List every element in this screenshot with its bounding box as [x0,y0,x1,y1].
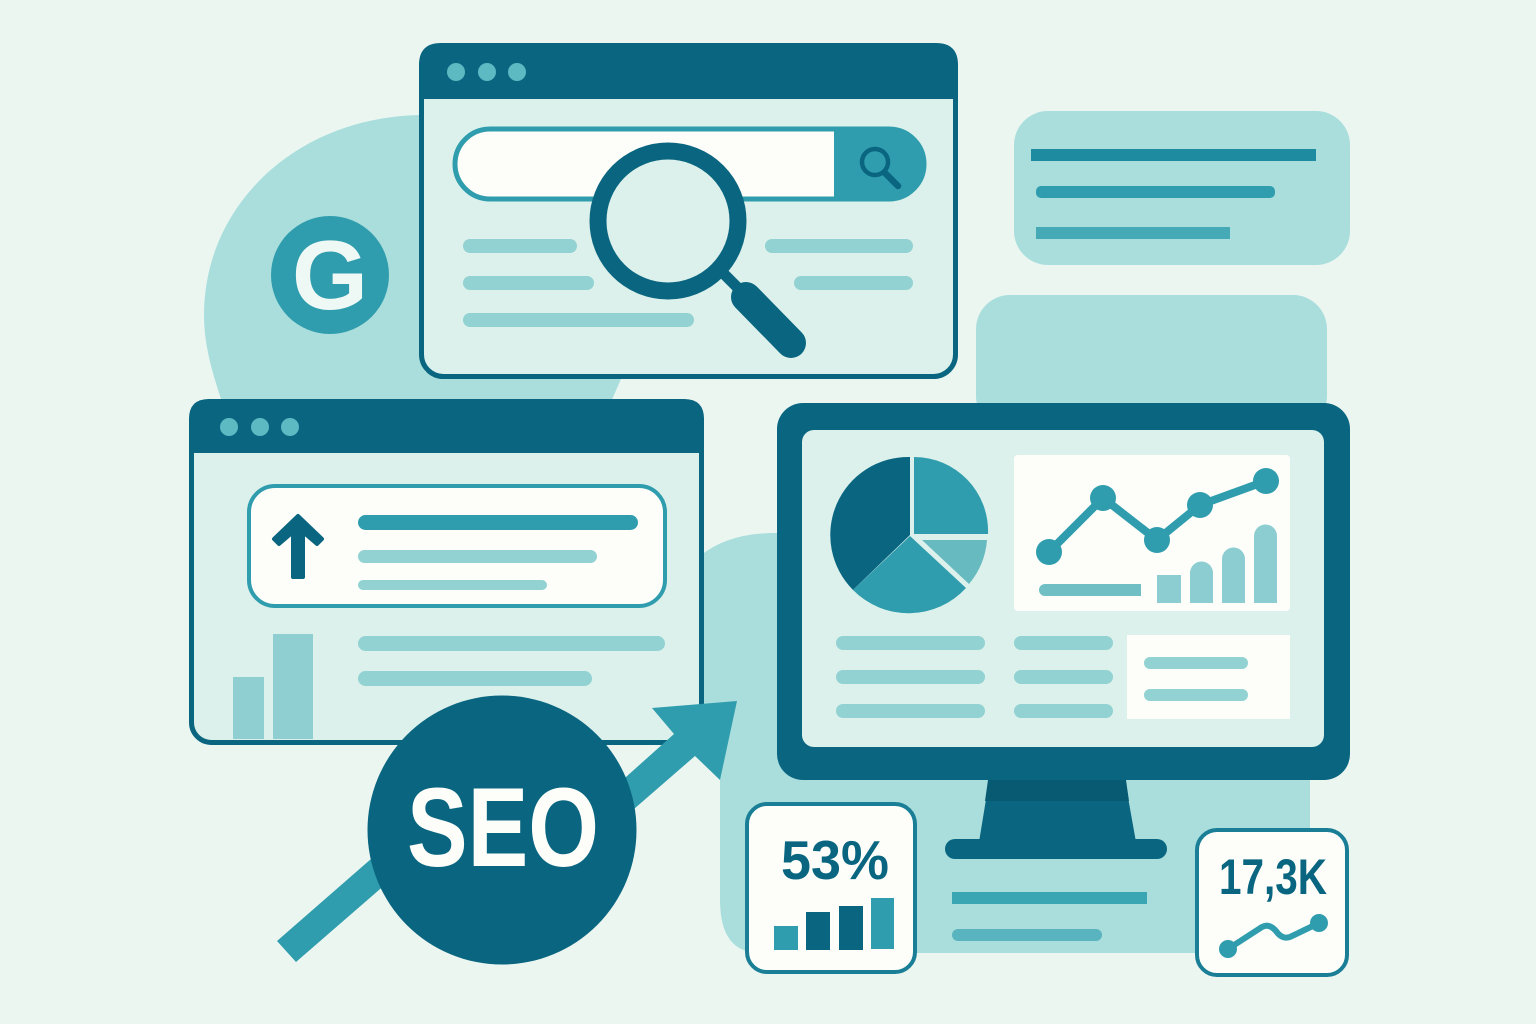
badge: SEO [368,696,636,964]
mini bar chart [774,898,894,950]
ranking result card [249,486,665,606]
mini line chart [1219,914,1328,958]
monitor bezel [777,403,1350,780]
card: top right text block [1014,111,1350,265]
monitor screen [802,430,1324,747]
icon: large magnifying glass [598,151,791,343]
legend bar [1039,584,1141,596]
caption lines under monitor [952,892,1147,941]
icon: up arrow [274,516,322,577]
stat card: 53% [747,804,915,972]
window control dots [220,418,299,436]
screen text lines left [836,636,985,718]
small white note card [1127,635,1290,719]
screen text lines middle [1014,636,1113,718]
line chart [1036,468,1279,565]
mini bars [1157,524,1277,603]
panel: search browser window [419,43,958,376]
badge: SEO: SEO [407,765,599,890]
stat card: 17,3K: 17,3K [1219,849,1327,905]
monitor stand [945,775,1167,859]
icon: G badge [271,216,389,334]
card text lines [358,515,638,590]
window control dots [447,63,526,81]
window title bar [419,43,958,99]
blob: behind monitor top [976,295,1327,430]
pie chart [830,457,988,613]
line and bar chart card [1014,455,1290,611]
blob: behind monitor bottom [700,533,1310,953]
stat card: 17,3K [1197,830,1347,975]
text lines [358,636,665,686]
result lines left [463,239,694,327]
window title bar [189,399,704,453]
icon: G badge: G [292,220,368,330]
search bar [455,127,926,201]
arrow: growth trend [277,701,737,962]
result lines right [765,239,913,290]
panel: ranking browser window [189,399,704,742]
stat card: 53%: 53% [781,829,889,891]
blob: top left behind search window [204,115,624,402]
icon: small magnifier [862,149,898,186]
panel: monitor dashboard [777,403,1350,859]
bar chart [233,634,313,739]
